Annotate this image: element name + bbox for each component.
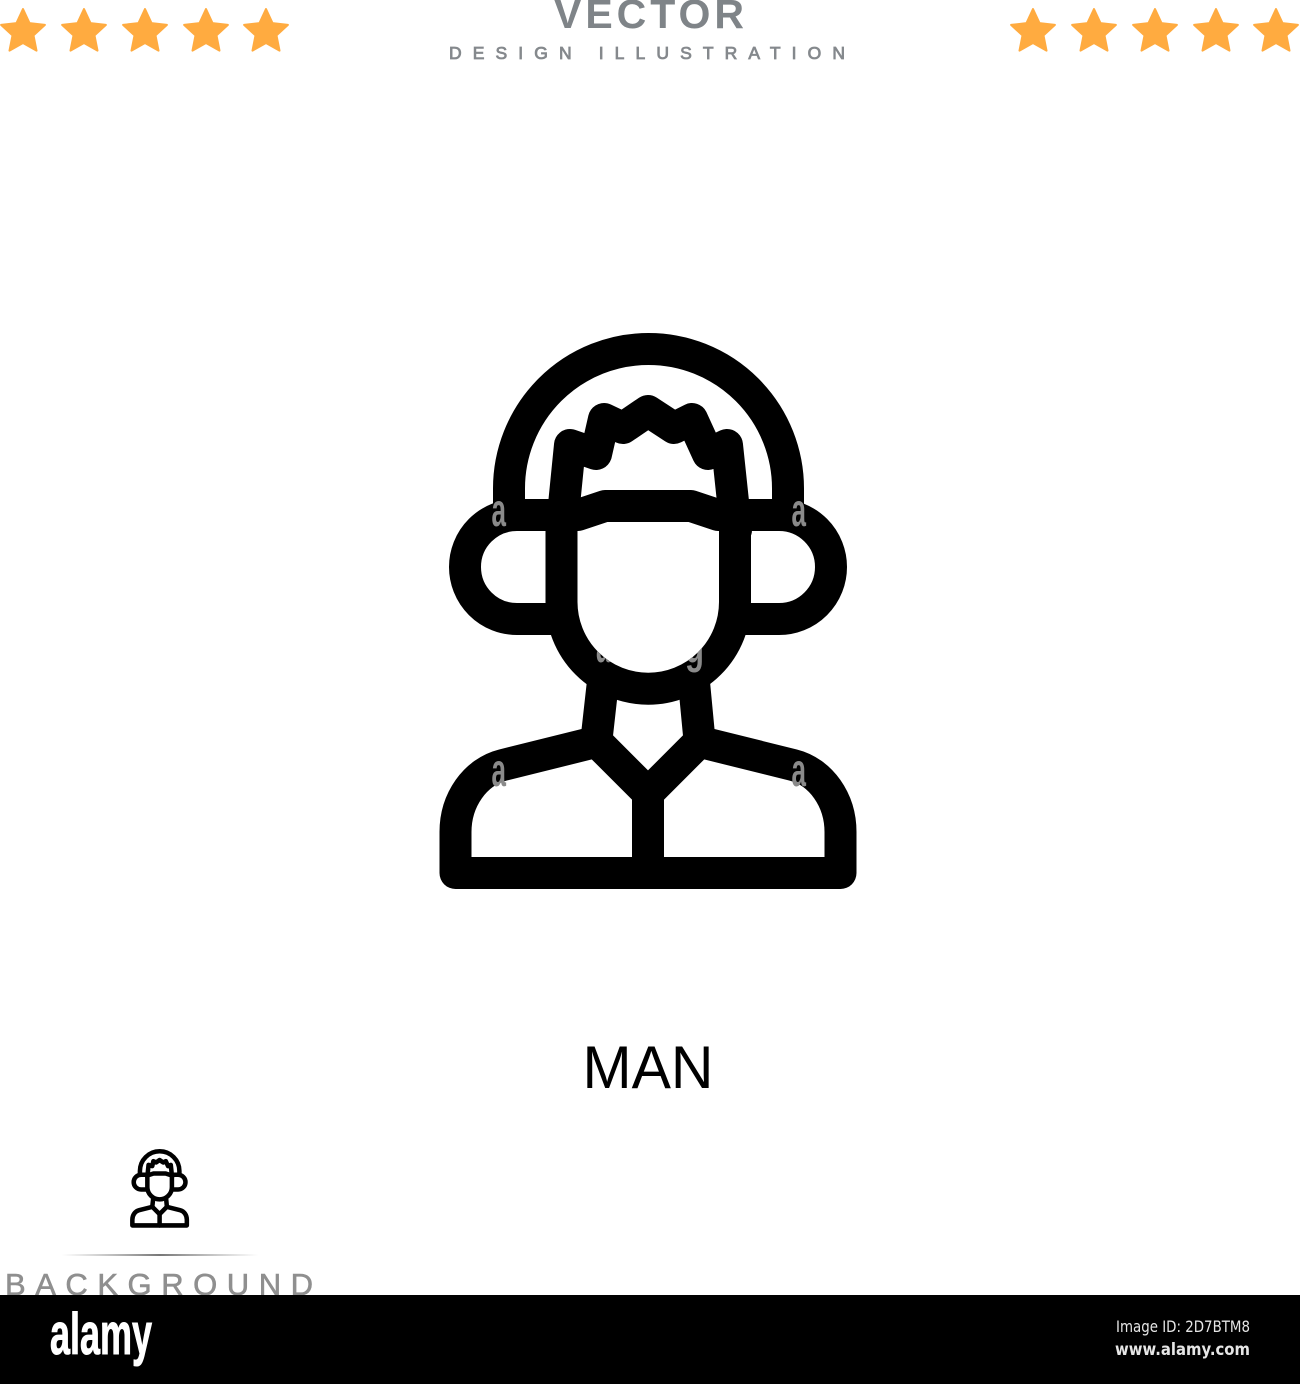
star 1 xyxy=(1011,9,1055,51)
star 4 xyxy=(1194,9,1238,51)
footer bar xyxy=(0,1295,1300,1384)
watermark a, left ear: a xyxy=(492,484,506,536)
right ear cup xyxy=(735,515,831,619)
watermark fragment, chin right: g xyxy=(685,621,704,673)
footer background xyxy=(0,1295,1300,1384)
right rating stars xyxy=(1011,9,1298,51)
alamy logo: alamy xyxy=(50,1302,152,1367)
face outline xyxy=(562,515,735,689)
forehead hairline xyxy=(570,506,726,515)
star 5 xyxy=(1254,9,1298,51)
icon: man wearing headphones xyxy=(456,349,840,873)
watermark letters xyxy=(492,484,806,796)
shirt placket xyxy=(632,793,664,873)
shoulders and body xyxy=(456,741,840,873)
collar xyxy=(600,745,696,793)
label: background: BACKGROUND xyxy=(5,1267,313,1302)
headband xyxy=(509,349,788,515)
left ear cup xyxy=(465,515,561,619)
watermark a, right shoulder: a xyxy=(792,744,806,796)
watermark a, left shoulder: a xyxy=(492,744,506,796)
star 2 xyxy=(62,9,106,51)
watermark fragment, chin left: a xyxy=(596,620,611,672)
star 2 xyxy=(1072,9,1116,51)
star 3 xyxy=(123,9,167,51)
neck xyxy=(597,675,699,735)
hair xyxy=(562,411,736,530)
icon title: man: MAN xyxy=(582,1034,714,1101)
left rating stars xyxy=(1,9,288,51)
image id: Image ID: 2D7BTM8 xyxy=(1116,1317,1250,1336)
star 3 xyxy=(1133,9,1177,51)
star 1 xyxy=(1,9,45,51)
watermark a, right ear: a xyxy=(792,484,806,536)
star 4 xyxy=(184,9,228,51)
subheading: design illustration: DESIGN ILLUSTRATION xyxy=(449,43,845,63)
star 5 xyxy=(244,9,288,51)
website: www.alamy.com xyxy=(1115,1340,1250,1360)
small icon: man wearing headphones xyxy=(132,1151,187,1225)
